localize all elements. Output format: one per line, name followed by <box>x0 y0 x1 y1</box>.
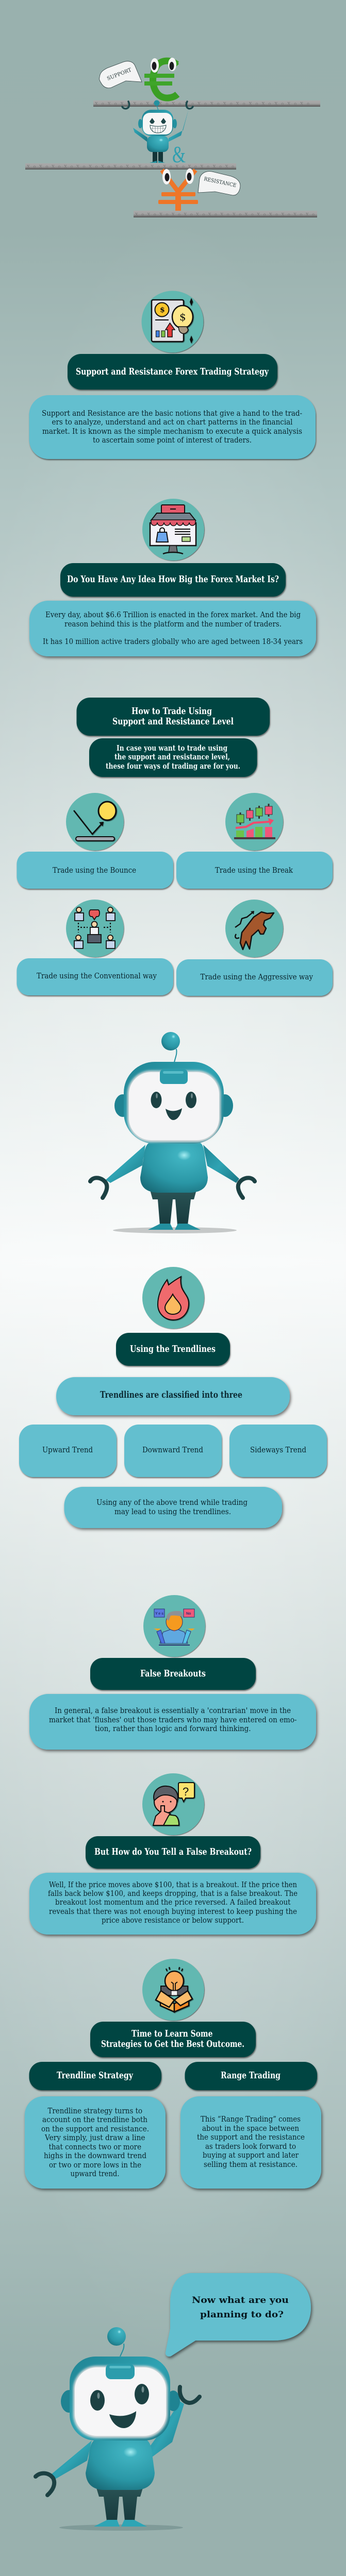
panel: classification <box>56 1377 290 1415</box>
panel: range trading: the support and the resistance <box>197 2132 305 2142</box>
text panel: ers to analyze, understand and act on chart patterns in the financial <box>52 417 293 427</box>
panel: bounce: Trade using the Bounce <box>53 866 136 875</box>
heading: trendline strategy: Trendline Strategy <box>57 2070 133 2081</box>
antenna <box>161 1032 180 1062</box>
section: size of the forex market <box>29 499 316 656</box>
panel: conventional <box>17 958 173 995</box>
text panel: reveals that there was not enough buying interest to keep pushing the <box>49 1907 297 1916</box>
heading: False Breakouts <box>140 1668 206 1679</box>
text panel: Well, If the price moves above $100, that is a breakout. If the price then <box>49 1880 297 1889</box>
legs <box>94 2486 147 2527</box>
text panel: breakout lost momentum and the price reversed. A failed breakout <box>55 1897 291 1907</box>
legs <box>148 1190 201 1230</box>
heading <box>90 1658 256 1690</box>
icon: yes or no person <box>143 1595 205 1657</box>
speech bubble: resistance <box>198 172 240 195</box>
speech bubble: support: SUPPORT <box>106 67 133 82</box>
heading: range trading <box>185 2062 317 2090</box>
text panel: It has 10 million active traders globally who are aged between 18-34 years <box>43 637 303 646</box>
heading <box>76 698 270 736</box>
panel: trend note <box>64 1487 282 1528</box>
robot mascot <box>90 1032 255 1233</box>
ampersand: & <box>172 142 186 167</box>
panel: upward trend <box>19 1425 117 1477</box>
icon: thinking person: ? <box>183 1785 189 1798</box>
icon: yes or no person: No <box>186 1612 191 1616</box>
heading <box>90 2022 256 2057</box>
panel: trendline strategy: account on the trendline both <box>42 2115 147 2124</box>
panel: sideways trend <box>229 1425 327 1477</box>
icon: document and bulb <box>141 291 203 352</box>
panel: downward trend <box>124 1425 222 1477</box>
ground shadow <box>113 1227 237 1233</box>
text panel: reason behind this is the platform and the number of traders. <box>64 619 282 629</box>
closing speech bubble <box>166 2273 311 2357</box>
panel: range trading: This “Range Trading” comes <box>201 2114 301 2124</box>
middle rail: X o X o X o X o X o X o X o X o X o X o X o X o X o X o X o X o X o <box>27 164 234 169</box>
heading: Do You Have Any Idea How Big the Forex Market Is? <box>67 574 279 585</box>
icon: conventional people <box>66 900 124 957</box>
text panel: market. It is known as the simple mechanism to execute a quick analysis <box>42 427 302 436</box>
icon: idea box <box>142 1959 204 2021</box>
panel: conventional: Trade using the Conventional way <box>37 971 157 980</box>
text panel: Every day, about $6.6 Trillion is enacted in the forex market. And the big <box>45 610 301 619</box>
section: false breakouts <box>29 1595 316 1750</box>
robot lifting the rail <box>122 100 193 163</box>
panel: range trading: buying at support and later <box>203 2150 299 2160</box>
panel: trendline strategy <box>25 2096 166 2189</box>
icon: aggressive bull <box>225 900 283 957</box>
icon: yes or no person: Yes <box>155 1612 163 1616</box>
text panel: In general, a false breakout is essentially a 'contrarian' move in the <box>55 1706 291 1715</box>
icon: thinking person <box>142 1773 204 1835</box>
heading: trendline strategy <box>29 2062 161 2090</box>
panel: trendline strategy: upward trend. <box>70 2169 120 2178</box>
arms <box>36 2387 200 2495</box>
arms <box>90 1145 255 1198</box>
panel: trendline strategy: Trendline strategy turns to <box>47 2106 142 2115</box>
icon: break candles <box>225 793 283 851</box>
heading: Strategies to Get the Best Outcome. <box>101 2039 244 2049</box>
panel: range trading <box>180 2096 321 2189</box>
panel: trendline strategy: highs in the downward trend <box>44 2151 146 2160</box>
lower rail: X o X o X o X o X o X o X o X o X o X o X o X o X o X o X o <box>135 212 315 217</box>
closing speech bubble: planning to do? <box>200 2310 284 2320</box>
heading: How to Trade Using <box>131 706 212 717</box>
speech bubble: resistance: RESISTANCE <box>203 176 237 189</box>
speech bubble: support <box>100 61 142 88</box>
closing speech bubble: Now what are you <box>192 2295 289 2306</box>
panel: aggressive: Trade using the Aggressive way <box>200 972 313 981</box>
heading: Support and Resistance Forex Trading Strategy <box>76 366 269 377</box>
icon: bounce <box>66 793 124 851</box>
sub-heading <box>89 738 257 777</box>
text panel <box>29 1873 316 1935</box>
icon: document and bulb: $ <box>160 306 165 314</box>
sub-heading: In case you want to trade using <box>117 743 227 753</box>
panel: range trading: selling them at resistance. <box>204 2160 298 2169</box>
sub-heading: these four ways of trading are for you. <box>106 761 240 771</box>
section: support and resistance strategy <box>29 291 316 459</box>
icon: flame <box>142 1267 204 1329</box>
head <box>61 2357 170 2441</box>
text panel: falls back below $100, and keeps dropping, that is a false breakout. The <box>48 1889 298 1898</box>
body <box>140 1143 208 1193</box>
section: using the trendlines <box>19 1267 327 1528</box>
panel: range trading: about in the space between <box>202 2124 299 2133</box>
panel: upward trend: Upward Trend <box>42 1445 93 1454</box>
panel: bounce <box>17 852 173 889</box>
heading: Time to Learn Some <box>131 2028 212 2039</box>
text panel <box>29 1694 316 1750</box>
panel: sideways trend: Sideways Trend <box>250 1445 306 1454</box>
waving robot <box>36 2327 200 2531</box>
section: how to trade <box>17 698 333 996</box>
section: strategies <box>25 1959 321 2189</box>
heading <box>86 1836 260 1869</box>
support rail: X o X o X o X o X o X o X o X o X o X o X o X o X o X o X o X o X o <box>95 101 309 106</box>
head <box>114 1062 233 1144</box>
heading <box>68 354 277 389</box>
hero illustration <box>25 58 320 217</box>
section: telling a false breakout <box>29 1773 316 1935</box>
heading <box>116 1333 230 1366</box>
panel: aggressive <box>176 959 333 996</box>
icon: document and bulb: $ <box>179 311 186 323</box>
panel: break <box>176 852 333 889</box>
text panel <box>29 601 316 656</box>
panel: trendline strategy: Very simply, just draw a line <box>44 2133 145 2142</box>
text panel <box>29 395 316 459</box>
heading: Support and Resistance Level <box>112 716 234 727</box>
heading: But How do You Tell a False Breakout? <box>94 1846 252 1857</box>
heading: range trading: Range Trading <box>221 2070 281 2081</box>
panel: range trading: as traders look forward to <box>205 2142 296 2151</box>
panel: trendline strategy: on the support and resistance. <box>41 2124 149 2133</box>
text panel: market that 'flushes' out those traders who may have entered on emo- <box>49 1715 297 1724</box>
body <box>86 2439 155 2490</box>
lower rail <box>134 211 317 217</box>
antenna <box>107 2327 126 2357</box>
text panel: tion, rather than logic and forward thinking. <box>95 1724 251 1733</box>
text panel: price above resistance or below support. <box>102 1916 244 1925</box>
panel: classification: Trendlines are classified into three <box>100 1389 242 1400</box>
icon: euro character <box>144 58 179 98</box>
panel: break: Trade using the Break <box>215 866 293 875</box>
text panel: Support and Resistance are the basic notions that give a hand to the trad- <box>42 409 302 418</box>
panel: trendline strategy: that connects two or more <box>48 2142 141 2151</box>
panel: trend note: Using any of the above trend while trading <box>96 1498 248 1507</box>
sub-heading: the support and resistance level, <box>114 752 230 761</box>
icon: online market <box>142 499 204 561</box>
panel: trend note: may lead to using the trendlines. <box>114 1507 231 1516</box>
heading <box>60 563 286 597</box>
text panel: to ascertain some point of interest of traders. <box>93 435 252 445</box>
panel: downward trend: Downward Trend <box>142 1445 203 1454</box>
heading: Using the Trendlines <box>130 1344 216 1354</box>
icon: yen character <box>158 168 198 211</box>
ground shadow <box>59 2524 183 2531</box>
panel: trendline strategy: or two or more lows in the <box>49 2160 141 2170</box>
